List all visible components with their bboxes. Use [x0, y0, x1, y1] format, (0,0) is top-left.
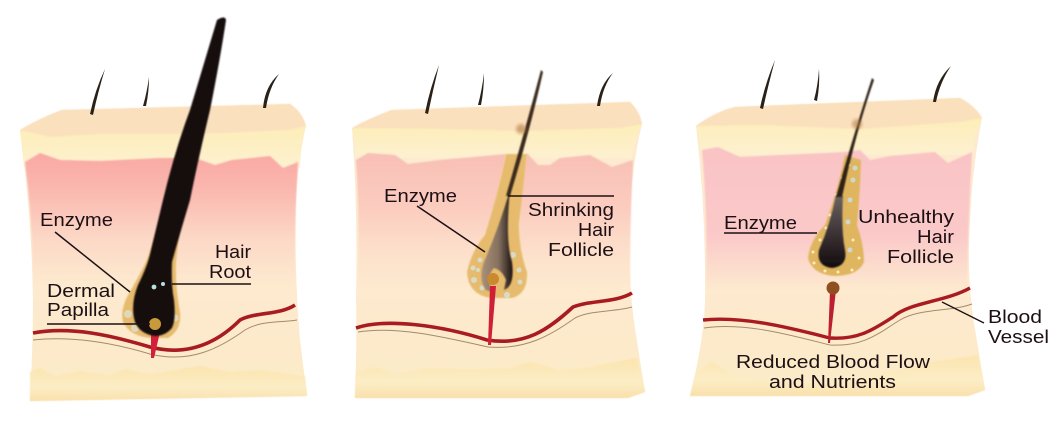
panel: healthy hair follicle: [20, 18, 307, 401]
pore shadow: [516, 124, 526, 134]
skin top surface: [20, 104, 306, 137]
label: reduced blood flow: and Nutrients: [769, 371, 896, 392]
label: hair root: [209, 241, 251, 282]
follicle sheath: [122, 190, 184, 338]
enzyme granules: [470, 252, 522, 298]
lower fatty band: [690, 355, 985, 396]
label: enzyme: Enzyme: [40, 209, 113, 230]
blood vessel: [33, 305, 295, 350]
label line: shrinking follicle: [508, 195, 614, 197]
dermal papilla: [149, 318, 161, 330]
enzyme granules: [124, 310, 178, 332]
blood vessel thin line: [33, 320, 297, 357]
blood vessel: [356, 293, 632, 341]
skin top surface: [696, 98, 982, 129]
root highlights: [152, 282, 165, 289]
capillary: [488, 286, 496, 345]
label: shrinking hair follicle: [528, 199, 614, 260]
detached dermal papilla: [826, 282, 840, 294]
label line: blood vessel: [942, 302, 984, 323]
small hairs: [425, 65, 613, 114]
blood vessel thin line: [704, 304, 972, 345]
upper yellow skin layer: [696, 118, 982, 155]
hair shaft: [506, 70, 543, 196]
label: dermal papilla: [47, 280, 115, 320]
blood vessel thin line: [358, 307, 632, 347]
label: hair root: Root: [209, 261, 251, 282]
label: blood vessel: [988, 306, 1049, 347]
label: shrinking hair follicle: Follicle: [548, 239, 614, 260]
label: unhealthy hair follicle: Unhealthy: [858, 206, 955, 227]
label line: enzyme: [55, 232, 130, 292]
skin block: [690, 98, 985, 396]
label: dermal papilla: Dermal: [47, 280, 115, 301]
small hairs: [90, 69, 279, 115]
label: dermal papilla: Papilla: [47, 299, 110, 320]
blue-white granules: [846, 166, 858, 252]
label: reduced blood flow: [736, 351, 931, 392]
skin block: [20, 104, 307, 401]
label line: enzyme: [724, 232, 817, 234]
label: unhealthy hair follicle: Hair: [917, 226, 954, 247]
blood vessel: [703, 288, 970, 338]
label: enzyme: Enzyme: [724, 212, 797, 233]
capillary: [828, 290, 836, 343]
capillary: [151, 332, 160, 358]
lower fatty band: [355, 358, 645, 398]
label: unhealthy hair follicle: [858, 206, 955, 267]
follicle sheath: [467, 154, 527, 298]
skin top surface: [352, 102, 642, 131]
hair shaft: [836, 78, 874, 197]
pink dermis layer: [356, 153, 506, 290]
label: unhealthy hair follicle: Follicle: [887, 246, 954, 267]
lower fatty band: [30, 366, 307, 401]
panel: shrinking hair follicle: [352, 65, 645, 398]
label: shrinking hair follicle: Hair: [578, 219, 614, 240]
pink dermis layer right: [519, 153, 633, 290]
pink dermis layer: [25, 153, 298, 285]
small hairs: [760, 60, 951, 109]
enzyme granules: [812, 164, 860, 274]
label: reduced blood flow: Reduced Blood Flow: [736, 351, 931, 372]
upper yellow skin layer: [352, 124, 642, 158]
label line: enzyme: [417, 206, 485, 252]
upper yellow skin layer: [20, 126, 306, 168]
label: hair root: Hair: [215, 241, 251, 262]
label: blood vessel: Blood: [988, 306, 1042, 327]
pink dermis layer: [702, 147, 972, 290]
label: enzyme: Enzyme: [384, 185, 457, 206]
label: blood vessel: Vessel: [988, 326, 1049, 347]
panel: unhealthy hair follicle: [690, 60, 1049, 396]
label line: dermal papilla: [47, 323, 150, 325]
skin block: [352, 102, 645, 398]
pore shadow: [852, 119, 862, 129]
follicle sheath: [808, 155, 864, 276]
shrinking bulb: [481, 190, 513, 292]
large black hair: [133, 18, 226, 336]
label line: hair root: [172, 283, 251, 285]
dark hair bulb: [819, 195, 845, 268]
dermal papilla: [487, 273, 499, 285]
label: shrinking hair follicle: Shrinking: [528, 199, 614, 220]
